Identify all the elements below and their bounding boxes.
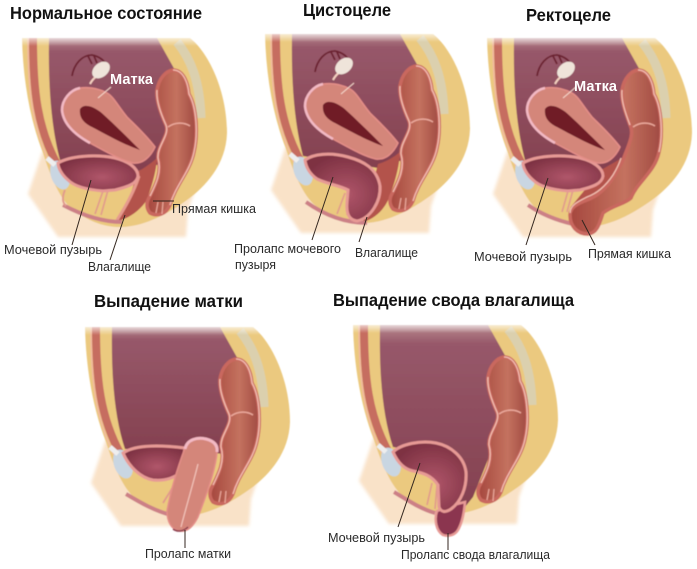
label: bladder: Мочевой пузырь	[474, 249, 572, 264]
heading: uterine prolapse: Выпадение матки	[94, 291, 243, 311]
flattened bladder	[123, 446, 185, 480]
prolapsed uterus	[167, 438, 217, 531]
label: bladder prolapse	[234, 177, 341, 272]
heading: rectocele: Ректоцеле	[526, 5, 611, 25]
label: rectum: Прямая кишка	[172, 201, 257, 216]
diagram: normal anatomy	[15, 34, 230, 237]
label: vagina: Влагалище	[88, 259, 151, 274]
label: vagina	[88, 215, 151, 274]
label: vagina: Влагалище	[355, 245, 418, 260]
panel: normal state	[4, 3, 257, 274]
label: uterus: Матка	[574, 78, 618, 95]
label: bladder	[474, 178, 572, 264]
heading: cystocele: Цистоцеле	[303, 0, 391, 20]
label: bladder	[4, 180, 102, 257]
prolapsed bladder	[305, 154, 380, 221]
bulging rectum	[570, 70, 661, 234]
label: vagina	[355, 217, 418, 260]
heading: vaginal vault prolapse: Выпадение свода влагалища	[333, 290, 574, 310]
diagram: vaginal vault prolapse anatomy	[346, 321, 561, 536]
heading: normal state: Нормальное состояние	[10, 3, 202, 23]
diagram: uterine prolapse anatomy	[78, 323, 293, 531]
label: bladder: Мочевой пузырь	[4, 242, 102, 257]
panel: uterine prolapse	[78, 291, 293, 561]
label: rectum	[582, 220, 672, 261]
diagram: cystocele anatomy	[258, 30, 473, 233]
label: rectum: Прямая кишка	[588, 246, 672, 261]
label: bladder	[328, 463, 425, 545]
panel: cystocele	[234, 0, 473, 272]
displaced bladder	[393, 442, 466, 511]
panel: vaginal vault prolapse	[328, 290, 574, 562]
prolapsed vault sac	[436, 502, 465, 536]
label: bladder prolapse: пузыря	[235, 257, 276, 272]
label: uterus: Матка	[110, 71, 154, 88]
label: vault prolapse: Пролапс свода влагалища	[401, 547, 551, 562]
label: uterus prolapse	[145, 530, 231, 561]
diagram: rectocele anatomy	[480, 34, 695, 237]
label: bladder: Мочевой пузырь	[328, 530, 425, 545]
panel: rectocele	[474, 5, 695, 264]
label: bladder prolapse: Пролапс мочевого	[234, 241, 341, 256]
label: uterus prolapse: Пролапс матки	[145, 546, 231, 561]
